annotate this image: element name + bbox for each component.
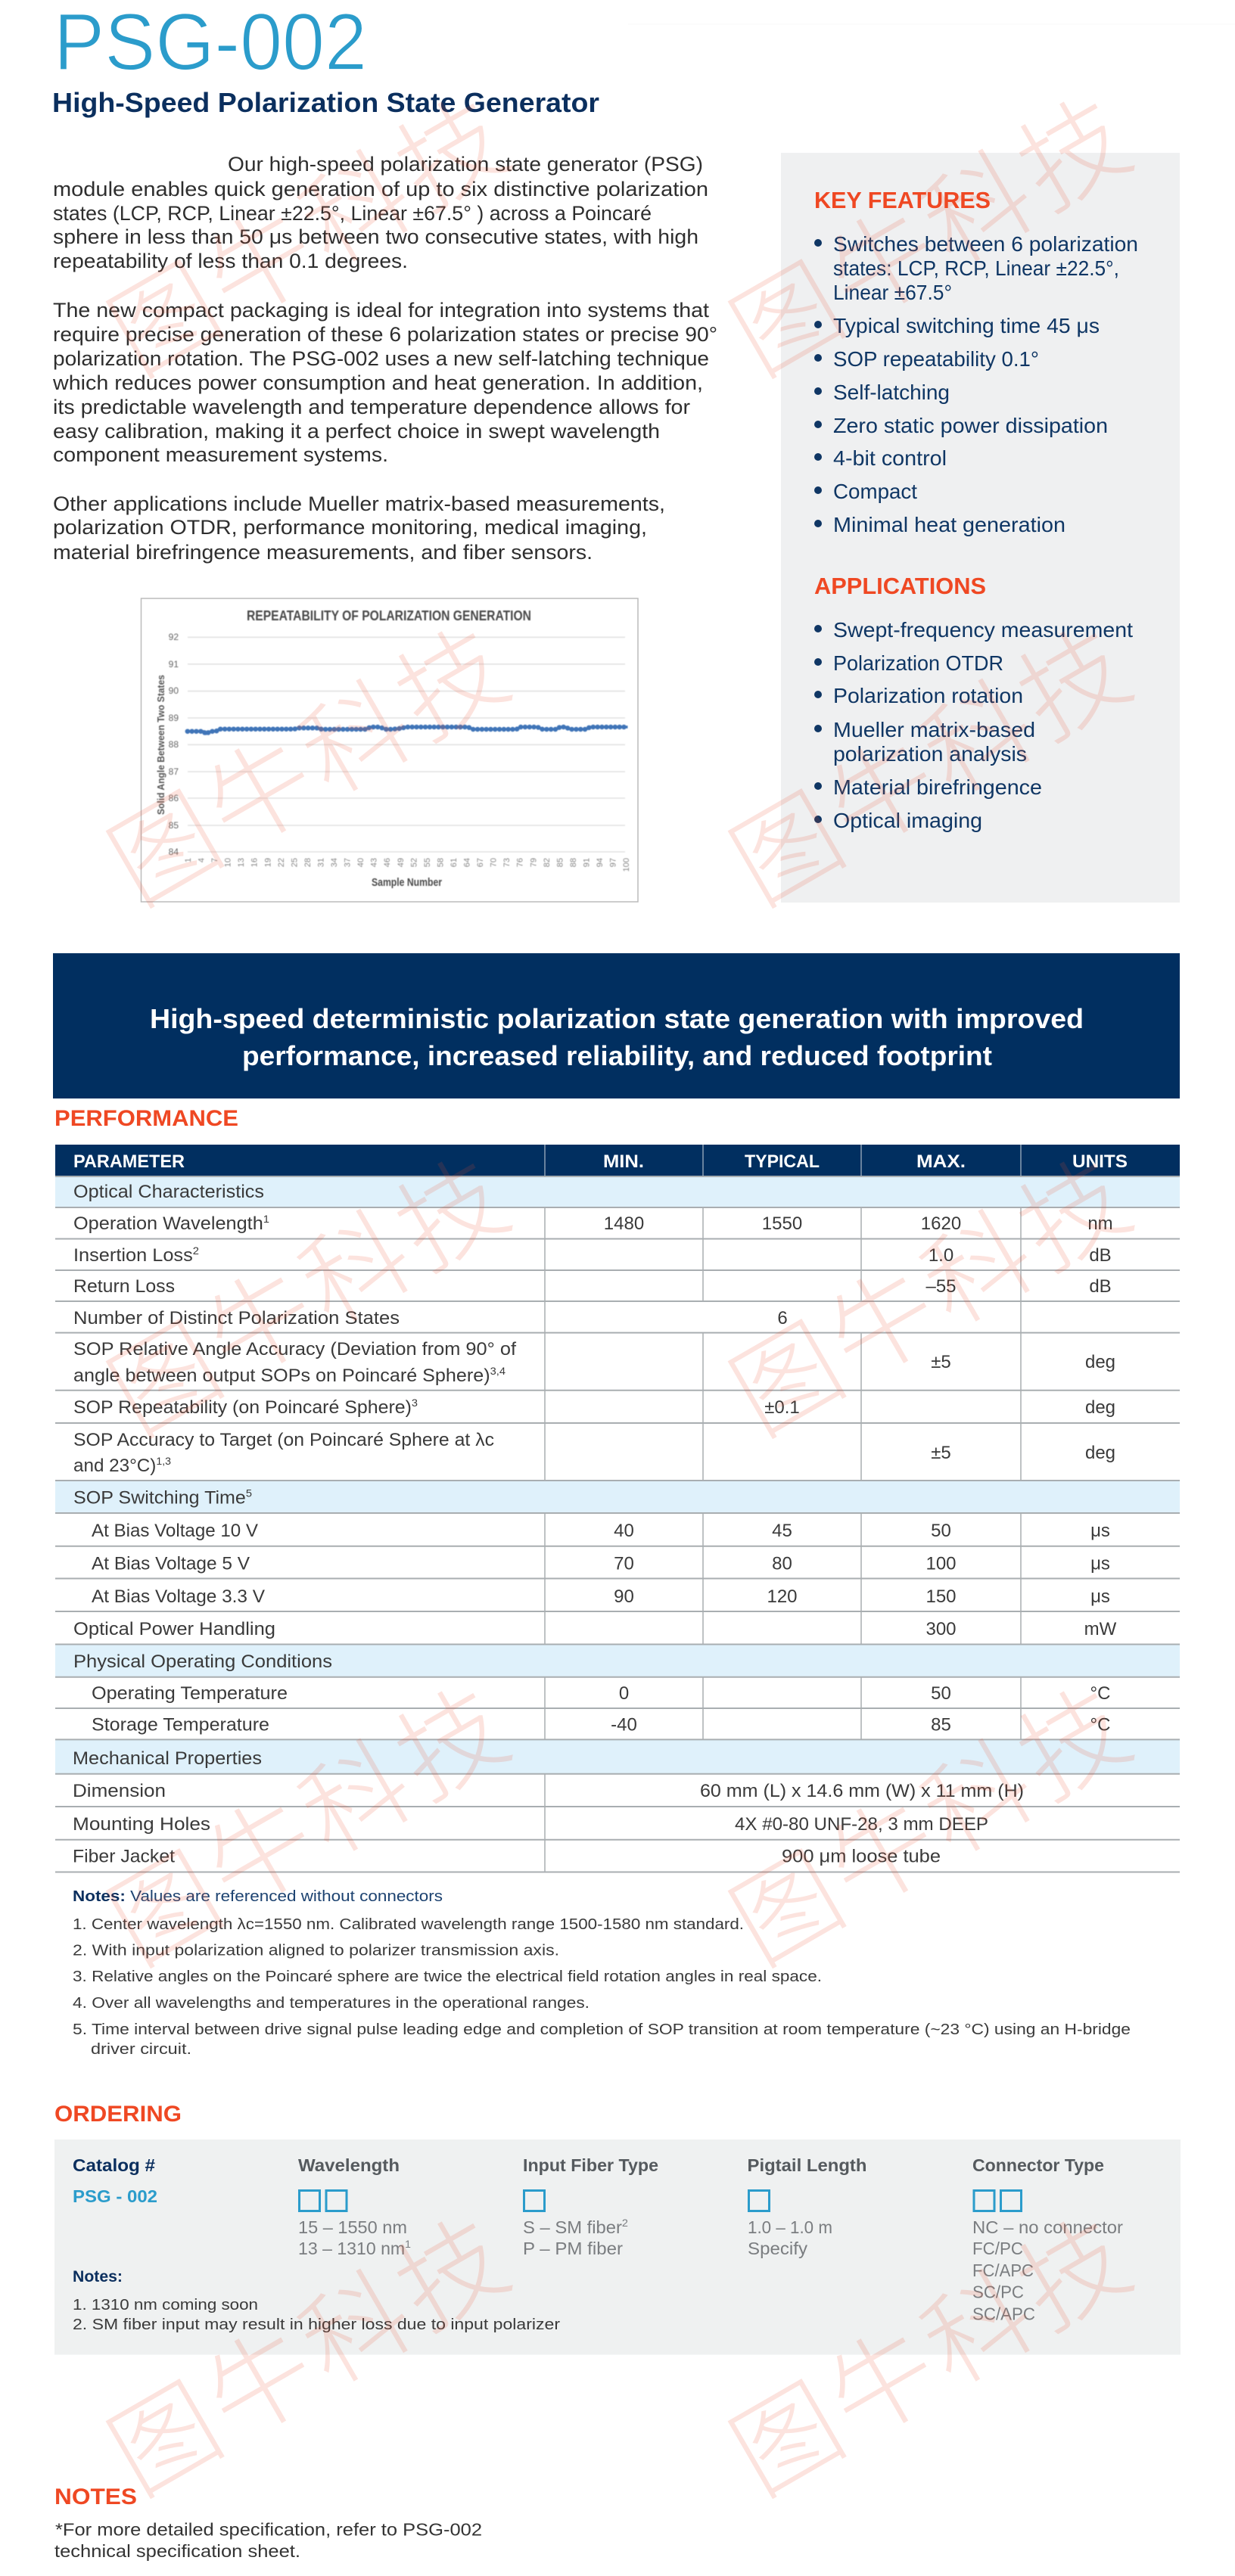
row: bias voltage 10 V: μs xyxy=(1090,1521,1110,1541)
row: sop accuracy to target: ±5 xyxy=(931,1443,951,1463)
row: return loss: dB xyxy=(1089,1276,1112,1297)
banner: High-speed deterministic polarization state generation with improved xyxy=(150,1003,1084,1034)
intro paragraph 3 xyxy=(53,493,665,564)
row: bias voltage 3.3 V: μs xyxy=(1090,1586,1110,1607)
row: sop repeatability: SOP Repeatability (on Poincaré Sphere) xyxy=(73,1397,399,1418)
intro paragraph 1: module enables quick generation of up to six distinctive polarization xyxy=(53,178,708,200)
intro paragraph 2: its predictable wavelength and temperature dependence allows for xyxy=(53,396,690,418)
row: sop accuracy to target: SOP Accuracy to Target (on Poincaré Sphere at λc xyxy=(73,1430,494,1450)
x axis labels: 22 xyxy=(277,858,286,867)
list: applications: Mueller matrix-based xyxy=(833,718,1035,741)
x axis labels: 94 xyxy=(596,858,605,867)
row: bias voltage 5 V: At Bias Voltage 5 V xyxy=(92,1554,250,1574)
row: bias voltage 3.3 V: 90 xyxy=(614,1586,634,1607)
y axis labels xyxy=(169,632,179,857)
row: bias voltage 3.3 V xyxy=(92,1586,1110,1607)
x axis labels: 13 xyxy=(237,858,246,867)
pigtail length column: Specify xyxy=(748,2239,808,2258)
pigtail length column: 1.0 – 1.0 m xyxy=(748,2217,832,2237)
watermarks: 图牛科技 xyxy=(700,585,1153,933)
banner xyxy=(53,953,1180,1098)
bottom note text xyxy=(54,2519,482,2561)
y axis labels: 84 xyxy=(169,847,179,857)
x axis labels: 19 xyxy=(263,858,272,867)
watermarks: 图牛科技 xyxy=(78,1115,530,1463)
intro paragraph 2: easy calibration, making it a perfect choice in swept wavelength xyxy=(53,420,660,443)
list: key features: SOP repeatability 0.1° xyxy=(833,347,1039,371)
row: bias voltage 10 V: 50 xyxy=(931,1521,951,1541)
row: operation wavelength: nm xyxy=(1087,1213,1113,1234)
row: bias voltage 5 V xyxy=(92,1554,1110,1574)
y axis labels: 85 xyxy=(169,820,179,831)
row: sop repeatability: deg xyxy=(1085,1397,1115,1418)
x axis labels: 1 xyxy=(184,858,193,862)
table notes: 2. With input polarization aligned to polarizer transmission axis. xyxy=(73,1943,559,1959)
ordering notes: 2. SM fiber input may result in higher loss due to input polarizer xyxy=(73,2317,560,2333)
row: sop repeatability: 3 xyxy=(412,1397,418,1409)
row: return loss: Return Loss xyxy=(73,1276,175,1297)
connector type column: FC/PC xyxy=(972,2239,1023,2258)
y axis labels: 88 xyxy=(169,739,179,750)
section row: sop switching time: SOP Switching Time xyxy=(73,1487,238,1509)
row: bias voltage 3.3 V: At Bias Voltage 3.3 V xyxy=(92,1586,265,1607)
table header: PARAMETER xyxy=(73,1151,185,1172)
list: applications: Material birefringence xyxy=(833,775,1042,799)
row: optical power handling xyxy=(73,1619,1117,1639)
row: mounting holes xyxy=(73,1814,988,1835)
table notes xyxy=(73,1888,1131,2058)
row: sop accuracy to target: and 23°C) xyxy=(73,1456,155,1476)
row: polarization states: 6 xyxy=(777,1308,788,1328)
list: key features: Linear ±67.5° xyxy=(833,281,952,304)
x axis labels: 28 xyxy=(303,858,313,867)
row: polarization states xyxy=(73,1308,788,1328)
x axis labels: 37 xyxy=(344,858,353,867)
intro paragraph 1: Our high-speed polarization state generator (PSG) xyxy=(228,153,703,176)
row: storage temperature xyxy=(92,1714,1110,1735)
watermarks: 图牛科技 xyxy=(78,55,530,403)
watermarks: 图牛科技 xyxy=(700,55,1153,403)
row: bias voltage 10 V: 40 xyxy=(614,1521,634,1541)
x axis labels: 43 xyxy=(370,858,379,867)
row: bias voltage 5 V: 100 xyxy=(925,1554,957,1574)
intro paragraph 1: repeatability of less than 0.1 degrees. xyxy=(53,250,408,272)
y axis labels: 86 xyxy=(169,793,179,803)
row: bias voltage 10 V: 45 xyxy=(772,1521,792,1541)
x axis labels: 25 xyxy=(290,858,299,867)
row: sop accuracy to target xyxy=(73,1430,1115,1476)
x axis labels xyxy=(184,858,631,872)
list: key features: Compact xyxy=(833,480,917,503)
row: storage temperature: Storage Temperature xyxy=(92,1714,269,1735)
table notes: Notes: Values are referenced without connectors xyxy=(73,1888,443,1905)
catalog number column: Catalog # xyxy=(73,2155,155,2175)
x axis labels: 85 xyxy=(555,858,565,867)
row: sop relative angle accuracy: 3,4 xyxy=(490,1365,506,1377)
list: applications: Polarization OTDR xyxy=(833,651,1003,675)
intro paragraph 1: sphere in less than 50 μs between two consecutive states, with high xyxy=(53,225,698,248)
x axis labels: 58 xyxy=(436,858,445,867)
input fiber type column: Input Fiber Type xyxy=(523,2155,658,2175)
list: applications: polarization analysis xyxy=(833,742,1027,766)
row: return loss: –55 xyxy=(925,1276,957,1297)
intro paragraph 2: The new compact packaging is ideal for integration into systems that xyxy=(53,299,710,322)
list: key features: states: LCP, RCP, Linear ±22.5°, xyxy=(833,256,1119,280)
row: dimension: Dimension xyxy=(73,1781,166,1801)
intro paragraph 2 xyxy=(52,299,717,466)
row: fiber jacket xyxy=(73,1847,941,1867)
list: key features: Switches between 6 polarization xyxy=(833,232,1138,256)
row: operation wavelength xyxy=(73,1213,1113,1234)
x axis labels: 61 xyxy=(450,858,459,867)
row: dimension: 60 mm (L) x 14.6 mm (W) x 11 mm (H) xyxy=(700,1781,1024,1801)
row: insertion loss: 1.0 xyxy=(929,1245,953,1266)
row: sop accuracy to target: 1,3 xyxy=(156,1455,171,1467)
row: optical power handling: 300 xyxy=(925,1619,957,1639)
y axis labels: 91 xyxy=(169,659,179,670)
y axis labels: 89 xyxy=(169,713,179,723)
row: operation wavelength: Operation Wavelength xyxy=(73,1213,254,1234)
heading: applications: APPLICATIONS xyxy=(814,573,986,599)
panel: key features and applications xyxy=(781,153,1180,903)
row: mounting holes: 4X #0-80 UNF-28, 3 mm DEEP xyxy=(735,1814,988,1835)
x axis labels: 52 xyxy=(409,858,418,867)
list: applications: Optical imaging xyxy=(833,809,982,832)
table header: UNITS xyxy=(1072,1151,1128,1172)
row: sop repeatability xyxy=(73,1397,1115,1418)
y axis labels: 92 xyxy=(169,632,179,642)
x axis labels: 31 xyxy=(316,858,325,867)
banner: performance, increased reliability, and reduced footprint xyxy=(242,1040,992,1071)
row: return loss xyxy=(73,1276,1112,1297)
heading: performance: PERFORMANCE xyxy=(54,1106,238,1131)
row: bias voltage 3.3 V: 150 xyxy=(925,1586,957,1607)
intro paragraph 2: which reduces power consumption and heat generation. In addition, xyxy=(52,371,703,394)
heading: ordering: ORDERING xyxy=(54,2102,182,2127)
row: operating temperature xyxy=(92,1683,1110,1704)
x axis labels: 100 xyxy=(622,858,631,872)
subtitle: High-Speed Polarization State Generator xyxy=(52,87,599,118)
heading: key features: KEY FEATURES xyxy=(814,187,991,213)
row: operating temperature: °C xyxy=(1090,1683,1110,1704)
row: bias voltage 10 V: At Bias Voltage 10 V xyxy=(92,1521,258,1541)
wavelength column: 15 – 1550 nm xyxy=(298,2217,407,2237)
wavelength column: 1 xyxy=(405,2238,411,2250)
list: key features: Typical switching time 45 μs xyxy=(833,314,1100,337)
wavelength column: 13 – 1310 nm xyxy=(298,2239,405,2258)
list: key features xyxy=(814,232,1138,536)
table notes: 5. Time interval between drive signal pulse leading edge and completion of SOP transition at room temperature (~23 °C) using an H-bridge xyxy=(73,2021,1131,2038)
row: mounting holes: Mounting Holes xyxy=(73,1814,210,1835)
section row: sop switching time: 5 xyxy=(246,1487,252,1499)
list: key features: 4-bit control xyxy=(833,446,947,470)
list: applications: Swept-frequency measurement xyxy=(833,618,1133,642)
chart title: REPEATABILITY OF POLARIZATION GENERATION xyxy=(247,608,531,623)
row: sop relative angle accuracy xyxy=(73,1339,1115,1386)
intro paragraph 2: polarization rotation. The PSG-002 uses a new self-latching technique xyxy=(53,347,709,370)
intro paragraph 3: material birefringence measurements, and fiber sensors. xyxy=(53,541,593,564)
connector type column: SC/PC xyxy=(972,2282,1024,2302)
row: fiber jacket: 900 μm loose tube xyxy=(782,1847,941,1867)
intro paragraph 1: states (LCP, RCP, Linear ±22.5°, Linear ±67.5° ) across a Poincaré xyxy=(53,202,652,225)
watermarks: 图牛科技 xyxy=(700,1645,1153,1993)
panel: ordering xyxy=(54,2139,1181,2354)
row: operation wavelength: 1550 xyxy=(762,1213,802,1234)
row: dimension xyxy=(73,1781,1024,1801)
list: key features: Minimal heat generation xyxy=(833,513,1065,536)
intro paragraph 1 xyxy=(53,153,708,272)
connector type column: FC/APC xyxy=(972,2261,1034,2280)
table notes: 3. Relative angles on the Poincaré sphere are twice the electrical field rotation angles in real space. xyxy=(73,1969,822,1985)
intro paragraph 3: Other applications include Mueller matrix-based measurements, xyxy=(53,493,665,515)
row: operating temperature: 0 xyxy=(619,1683,629,1704)
row: sop relative angle accuracy: deg xyxy=(1085,1352,1115,1372)
watermarks: 图牛科技 xyxy=(78,2175,530,2523)
row: optical power handling: mW xyxy=(1084,1619,1117,1639)
x axis labels: 46 xyxy=(383,858,392,867)
connector type column: SC/APC xyxy=(972,2304,1035,2324)
row: bias voltage 5 V: 80 xyxy=(772,1554,792,1574)
row: insertion loss: 2 xyxy=(193,1244,199,1257)
row: sop relative angle accuracy: SOP Relative Angle Accuracy (Deviation from 90° of xyxy=(73,1339,516,1359)
row: operation wavelength: 1480 xyxy=(604,1213,644,1234)
x axis labels: 97 xyxy=(609,858,618,867)
x axis labels: 79 xyxy=(529,858,538,867)
x axis labels: 67 xyxy=(476,858,485,867)
x axis labels: 34 xyxy=(330,858,339,867)
watermarks: 图牛科技 xyxy=(78,585,530,933)
ordering notes xyxy=(73,2268,560,2333)
table notes: 1. Center wavelength λc=1550 nm. Calibrated wavelength range 1500-1580 nm standard. xyxy=(73,1916,744,1933)
x axis labels: 91 xyxy=(583,858,592,867)
row: bias voltage 10 V xyxy=(92,1521,1110,1541)
row: operating temperature: Operating Temperature xyxy=(92,1683,288,1704)
catalog number column xyxy=(73,2155,157,2206)
x axis labels: 49 xyxy=(397,858,406,867)
wavelength column: Wavelength xyxy=(298,2155,400,2175)
row: bias voltage 5 V: μs xyxy=(1090,1554,1110,1574)
row: fiber jacket: Fiber Jacket xyxy=(73,1847,175,1867)
intro paragraph 3: polarization OTDR, performance monitoring, medical imaging, xyxy=(53,516,647,539)
line chart: repeatability of polarization generation xyxy=(141,598,638,902)
connector type column xyxy=(972,2155,1123,2324)
list: key features: Zero static power dissipation xyxy=(833,414,1108,437)
row: operating temperature: 50 xyxy=(931,1683,951,1704)
row: storage temperature: °C xyxy=(1090,1714,1110,1735)
x axis labels: 70 xyxy=(490,858,499,867)
x axis title: Sample Number xyxy=(372,876,442,889)
watermarks: 图牛科技 xyxy=(700,1115,1153,1463)
connector type column: NC – no connector xyxy=(972,2217,1123,2237)
x axis labels: 64 xyxy=(463,858,472,867)
x axis labels: 7 xyxy=(210,858,219,862)
intro paragraph 2: require precise generation of these 6 polarization states or precise 90° xyxy=(53,323,717,346)
row: insertion loss: Insertion Loss xyxy=(73,1245,186,1266)
performance table xyxy=(55,1145,1180,1872)
bottom note text: *For more detailed specification, refer to PSG-002 xyxy=(55,2519,482,2539)
row: insertion loss xyxy=(73,1244,1112,1266)
heading: notes: NOTES xyxy=(54,2484,137,2509)
y axis title: Solid Angle Between Two States xyxy=(155,675,166,815)
row: operation wavelength: 1620 xyxy=(921,1213,961,1234)
list: applications: Polarization rotation xyxy=(833,684,1023,707)
row: storage temperature: 85 xyxy=(931,1714,951,1735)
x axis labels: 10 xyxy=(224,858,233,867)
table header: MIN. xyxy=(603,1151,644,1172)
watermarks: 图牛科技 xyxy=(700,2175,1153,2523)
input fiber type column: P – PM fiber xyxy=(523,2239,623,2258)
list: key features: Self-latching xyxy=(833,381,950,404)
row: sop relative angle accuracy: angle between output SOPs on Poincaré Sphere) xyxy=(73,1366,471,1386)
row: insertion loss: dB xyxy=(1089,1245,1112,1266)
table header xyxy=(55,1145,1180,1176)
intro paragraph 2: component measurement systems. xyxy=(53,443,388,466)
section row: mechanical properties: Mechanical Properties xyxy=(73,1748,262,1769)
table notes: driver circuit. xyxy=(91,2041,191,2058)
x axis labels: 76 xyxy=(516,858,525,867)
row: storage temperature: -40 xyxy=(611,1714,637,1735)
row: sop repeatability: ±0.1 xyxy=(764,1397,800,1418)
pigtail length column: Pigtail Length xyxy=(748,2155,867,2175)
data series xyxy=(188,727,628,734)
catalog number column: PSG - 002 xyxy=(73,2186,157,2206)
bottom note text: technical specification sheet. xyxy=(54,2541,300,2561)
row: operation wavelength: 1 xyxy=(263,1213,269,1225)
input fiber type column xyxy=(523,2155,658,2258)
x axis labels: 73 xyxy=(502,858,512,867)
row: bias voltage 5 V: 70 xyxy=(614,1554,634,1574)
x axis labels: 82 xyxy=(543,858,552,867)
table notes: 4. Over all wavelengths and temperatures in the operational ranges. xyxy=(73,1995,590,2012)
pigtail length column xyxy=(748,2155,867,2258)
ordering notes: 1. 1310 nm coming soon xyxy=(73,2297,258,2313)
x axis labels: 4 xyxy=(197,858,206,862)
row: optical power handling: Optical Power Handling xyxy=(73,1619,275,1639)
row: polarization states: Number of Distinct Polarization States xyxy=(73,1308,400,1328)
row: sop accuracy to target: deg xyxy=(1085,1443,1115,1463)
list: applications xyxy=(814,618,1133,832)
row: bias voltage 3.3 V: 120 xyxy=(767,1586,798,1607)
x axis labels: 16 xyxy=(250,858,260,867)
x axis labels: 88 xyxy=(569,858,578,867)
input fiber type column: 2 xyxy=(622,2217,628,2229)
input fiber type column: S – SM fiber xyxy=(523,2217,619,2237)
table header: TYPICAL xyxy=(745,1151,820,1172)
wavelength column xyxy=(298,2155,411,2258)
x axis labels: 40 xyxy=(356,858,366,867)
x axis labels: 55 xyxy=(423,858,432,867)
connector type column: Connector Type xyxy=(972,2155,1104,2175)
watermarks: 图牛科技 xyxy=(78,1645,530,1993)
table header: MAX. xyxy=(916,1151,966,1172)
y axis labels: 87 xyxy=(169,766,179,777)
section row: physical operating conditions: Physical Operating Conditions xyxy=(73,1652,332,1672)
row: sop relative angle accuracy: ±5 xyxy=(931,1352,951,1372)
ordering notes: Notes: xyxy=(73,2268,123,2285)
y axis labels: 90 xyxy=(169,685,179,696)
section row: optical characteristics: Optical Characteristics xyxy=(73,1182,264,1202)
